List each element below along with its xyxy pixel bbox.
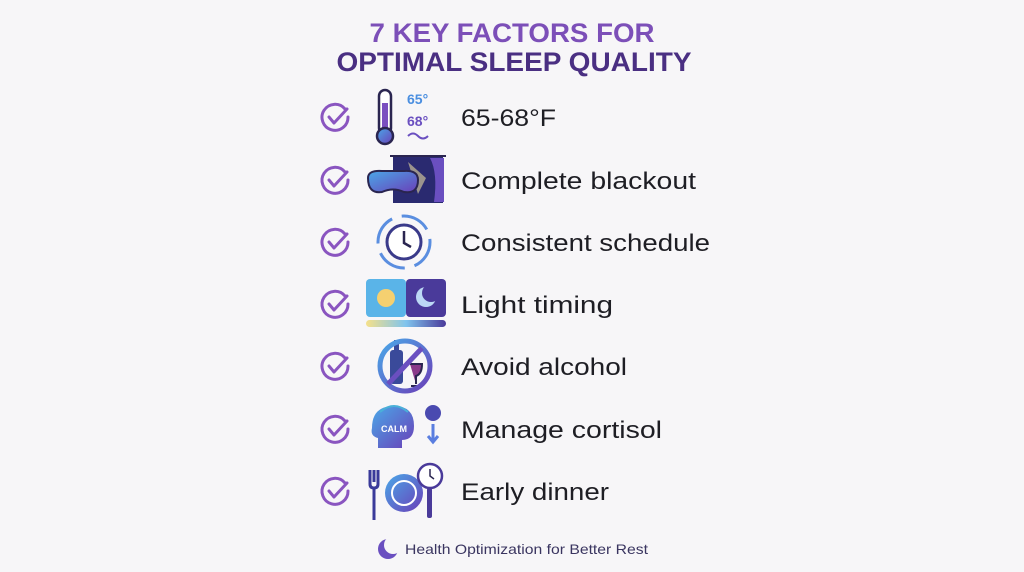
item labels: 65-68°F <box>461 105 556 132</box>
item labels: Early dinner <box>461 479 609 506</box>
item labels: Manage cortisol <box>461 417 662 444</box>
item labels: Avoid alcohol <box>461 354 627 381</box>
title <box>336 18 692 77</box>
icon: light timing <box>366 279 446 327</box>
title: OPTIMAL SLEEP QUALITY <box>336 47 692 77</box>
icon: avoid alcohol <box>380 340 430 391</box>
icon: calm head <box>372 405 441 448</box>
item labels: Consistent schedule <box>461 230 710 257</box>
icon: thermometer <box>377 90 428 144</box>
item labels: Light timing <box>461 292 613 319</box>
checkmarks <box>322 104 348 504</box>
icon: calm head: CALM <box>381 424 407 434</box>
footer: Health Optimization for Better Rest <box>405 541 648 557</box>
icon: blackout mask <box>368 156 446 203</box>
item labels <box>461 105 710 506</box>
icon: thermometer: 65° <box>407 91 428 107</box>
icon: clock with arrows <box>378 216 430 268</box>
icon: thermometer: 68° <box>407 113 428 129</box>
footer <box>378 536 648 559</box>
title: 7 KEY FACTORS FOR <box>370 18 654 48</box>
item labels: Complete blackout <box>461 168 696 195</box>
icon: early dinner <box>370 464 442 520</box>
